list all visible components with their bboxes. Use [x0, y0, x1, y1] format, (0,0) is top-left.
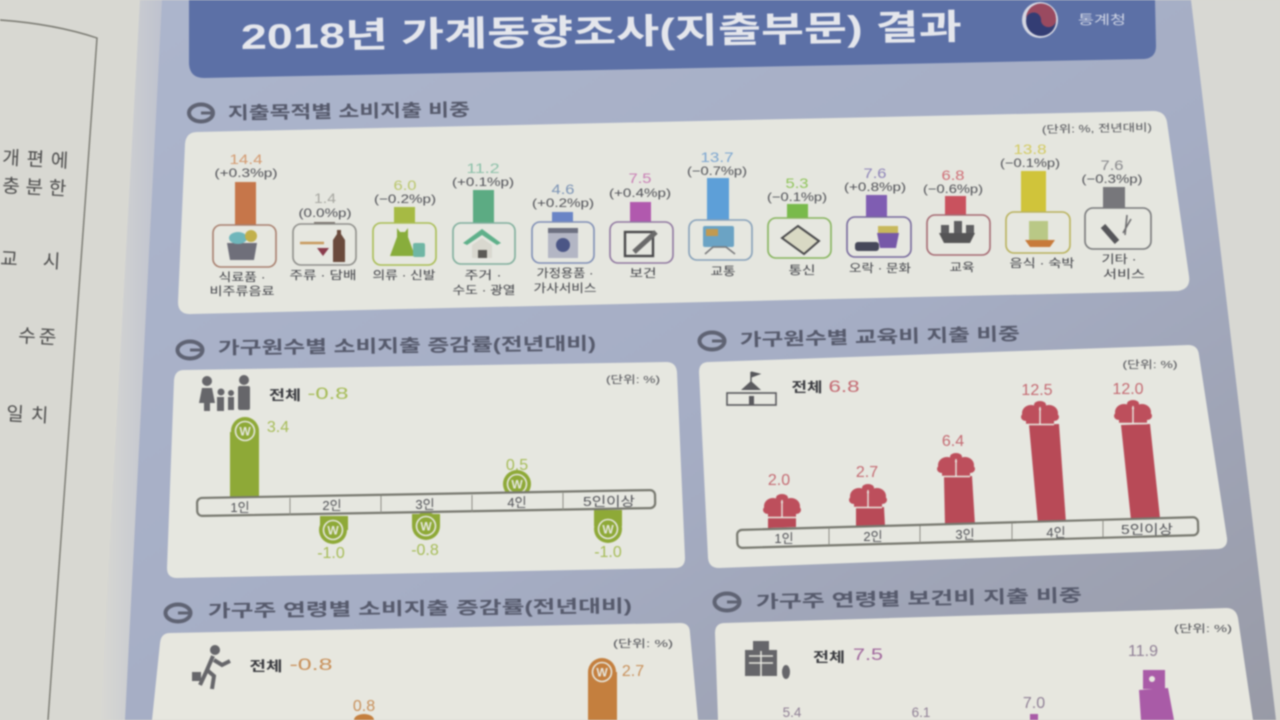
- item: food and lodging: (−0.1%p): [1000, 156, 1060, 170]
- diverging bar chart: 3인: [415, 497, 435, 512]
- diverging bar chart: 4인: [507, 495, 527, 510]
- item: food: 14.4: [230, 152, 263, 167]
- diverging bar chart: 5인이상: [583, 494, 635, 509]
- value labels: [768, 381, 1144, 489]
- panel: consumption change by household size: [167, 362, 685, 578]
- item: alcohol and tobacco: [290, 191, 356, 282]
- title banner: [189, 0, 1156, 78]
- unit note: (단위: %): [1122, 358, 1178, 371]
- logo: Statistics Korea emblem: 통계청: [1078, 13, 1126, 27]
- item: household goods: 4.6: [552, 182, 574, 197]
- bar chart top: 11.9: [1128, 643, 1158, 660]
- item: clothing: 의류 · 신발: [372, 269, 436, 282]
- item: recreation: 오락 · 문화: [849, 262, 911, 275]
- overall value: 전체: [269, 388, 301, 403]
- bar chart top: 2.7: [622, 663, 644, 680]
- panel: spending share by purpose: [178, 111, 1189, 314]
- item: education: 교육: [950, 261, 974, 274]
- left page text fragments: 교 시: [0, 249, 61, 273]
- item: miscellaneous services: (−0.3%p): [1082, 172, 1142, 186]
- bar chart top: 6.1: [912, 705, 930, 720]
- bar chart: [737, 381, 1198, 548]
- title text: 2018년 가계동향조사(지출부문) 결과: [241, 8, 962, 57]
- value labels: [267, 419, 622, 562]
- item: alcohol and tobacco: 1.4: [314, 191, 337, 206]
- bar chart: 4인: [1046, 525, 1066, 540]
- item: education: [923, 168, 990, 274]
- panel: health spending share by age of householder: 7.5: [853, 645, 883, 664]
- bar chart top: [783, 643, 1174, 720]
- section heading: health spending share by age of householder: [714, 585, 1082, 612]
- bar chart top: 0.8: [353, 698, 375, 715]
- overall value: 전체: [250, 659, 282, 674]
- item: health: (+0.4%p): [609, 186, 671, 200]
- item: transport: [687, 150, 752, 278]
- item: food: 식료품 ·: [218, 271, 266, 284]
- item: health: 보건: [630, 267, 656, 280]
- item: health: 7.5: [628, 171, 652, 186]
- value labels: 12.0: [1112, 381, 1144, 398]
- left page text fragments: 충분한: [2, 175, 67, 200]
- item: household goods: 가사서비스: [534, 282, 596, 295]
- axis box: [197, 490, 655, 516]
- panel: education spending share by household size: 6.8: [828, 377, 860, 396]
- value labels: 2.7: [856, 464, 878, 481]
- coin markers: [231, 417, 622, 544]
- value labels: -1.0: [317, 545, 345, 562]
- value labels: 2.0: [768, 472, 790, 489]
- item: household goods: (+0.2%p): [532, 196, 594, 210]
- section heading: health spending share by age of householder: 가구주 연령별 보건비 지출 비중: [756, 585, 1082, 612]
- value labels: -0.8: [411, 542, 439, 559]
- item: food and lodging: [1000, 142, 1075, 270]
- item: transport: 교통: [710, 265, 736, 278]
- unit note: (단위: %, 전년대비): [1042, 121, 1152, 136]
- icon: running commuter: [192, 646, 230, 689]
- item: food: (+0.3%p): [214, 166, 278, 180]
- unit note: (단위: %): [1174, 622, 1232, 635]
- panel: consumption change by age of householder: [152, 623, 698, 720]
- left page frame line: [0, 20, 97, 720]
- item: housing: 수도 · 광열: [452, 284, 516, 297]
- overall value: 전체: [792, 380, 822, 395]
- bar chart top: 7.0: [1023, 695, 1045, 712]
- unit note: (단위: %): [606, 373, 660, 386]
- item: recreation: [844, 166, 911, 275]
- item: communication: 5.3: [786, 176, 808, 191]
- section heading: spending share by purpose: [189, 100, 470, 123]
- item: food and lodging: 음식 · 숙박: [1010, 257, 1075, 270]
- item: food: [210, 152, 278, 298]
- item: food: 비주류음료: [210, 285, 274, 298]
- item: household goods: 가정용품 ·: [536, 267, 594, 280]
- item: miscellaneous services: 7.6: [1100, 158, 1124, 173]
- item: miscellaneous services: [1082, 158, 1151, 281]
- diverging bar chart: 2인: [322, 498, 342, 513]
- value labels: 12.5: [1021, 382, 1053, 399]
- logo: Statistics Korea emblem: [1022, 2, 1126, 38]
- item: housing: 11.2: [466, 161, 500, 176]
- section heading: consumption change by household size: [178, 333, 596, 358]
- item: education: 6.8: [942, 168, 964, 183]
- value labels: -1.0: [594, 544, 622, 561]
- item: household goods: [532, 182, 596, 295]
- panel: consumption change by household size: -0.8: [308, 384, 348, 403]
- left book page: [0, 0, 170, 720]
- left page text fragments: 일치: [6, 403, 49, 427]
- bar chart top: [353, 658, 644, 720]
- item: food and lodging: 13.8: [1014, 142, 1046, 157]
- item: housing: (+0.1%p): [452, 175, 514, 189]
- left page text fragments: 수준: [18, 326, 57, 349]
- section heading: consumption change by household size: 가구원수별 소비지출 증감률(전년대비): [218, 333, 596, 358]
- item: recreation: (+0.8%p): [844, 180, 906, 194]
- item: communication: (−0.1%p): [767, 190, 827, 204]
- item: transport: 13.7: [700, 150, 734, 165]
- icon: school: [727, 372, 776, 405]
- icon: hospital: [745, 641, 790, 679]
- item: miscellaneous services: 기타 ·: [1102, 253, 1136, 266]
- unit note: (단위: %): [613, 637, 673, 650]
- item: health: [609, 171, 673, 280]
- item: clothing: (−0.2%p): [374, 192, 436, 206]
- diverging bar chart: [197, 417, 655, 562]
- item: miscellaneous services: 서비스: [1103, 268, 1145, 281]
- overall value: 전체: [813, 650, 845, 665]
- item: transport: (−0.7%p): [687, 164, 747, 178]
- item: housing: 주거 ·: [464, 269, 502, 282]
- right side paper: [1188, 0, 1280, 720]
- section heading: consumption change by age of householder: [166, 596, 632, 622]
- section heading: education spending share by household size: 가구원수별 교육비 지출 비중: [740, 324, 1020, 350]
- left page text fragments: 개편에: [2, 147, 69, 172]
- bar chart: 3인: [955, 527, 975, 542]
- gutter shadow: [100, 0, 165, 720]
- book markers: [763, 494, 801, 518]
- section heading: consumption change by age of householder: 가구주 연령별 소비지출 증감률(전년대비): [208, 596, 632, 621]
- item: housing: [452, 161, 516, 297]
- panel: consumption change by age of householder: -0.8: [290, 655, 332, 674]
- icon: family: [199, 375, 250, 411]
- bar chart: 1인: [774, 531, 794, 546]
- item: communication: 통신: [788, 264, 816, 277]
- left page text fragments: [0, 147, 69, 427]
- section heading: education spending share by household size: [700, 324, 1020, 350]
- bar chart top: 5.4: [783, 705, 802, 720]
- panel: health spending share by age of householder: [715, 608, 1253, 720]
- item: recreation: 7.6: [864, 166, 886, 181]
- item: clothing: [372, 178, 436, 282]
- item: education: (−0.6%p): [923, 182, 983, 196]
- value labels: 6.4: [942, 433, 964, 450]
- item: clothing: 6.0: [394, 178, 416, 193]
- bar chart: 2인: [863, 529, 883, 544]
- diverging bar chart: 1인: [230, 500, 250, 515]
- item: communication: [767, 176, 831, 277]
- axis box: [737, 517, 1198, 548]
- section heading: spending share by purpose: 지출목적별 소비지출 비중: [228, 100, 470, 123]
- value labels: 3.4: [267, 419, 289, 436]
- panel: education spending share by household size: [699, 345, 1227, 568]
- bar chart top: W: [596, 666, 608, 680]
- item: alcohol and tobacco: 주류 · 담배: [290, 269, 356, 282]
- value labels: 0.5: [506, 457, 528, 474]
- item: alcohol and tobacco: (0.0%p): [298, 206, 352, 220]
- bar chart: 5인이상: [1121, 522, 1173, 537]
